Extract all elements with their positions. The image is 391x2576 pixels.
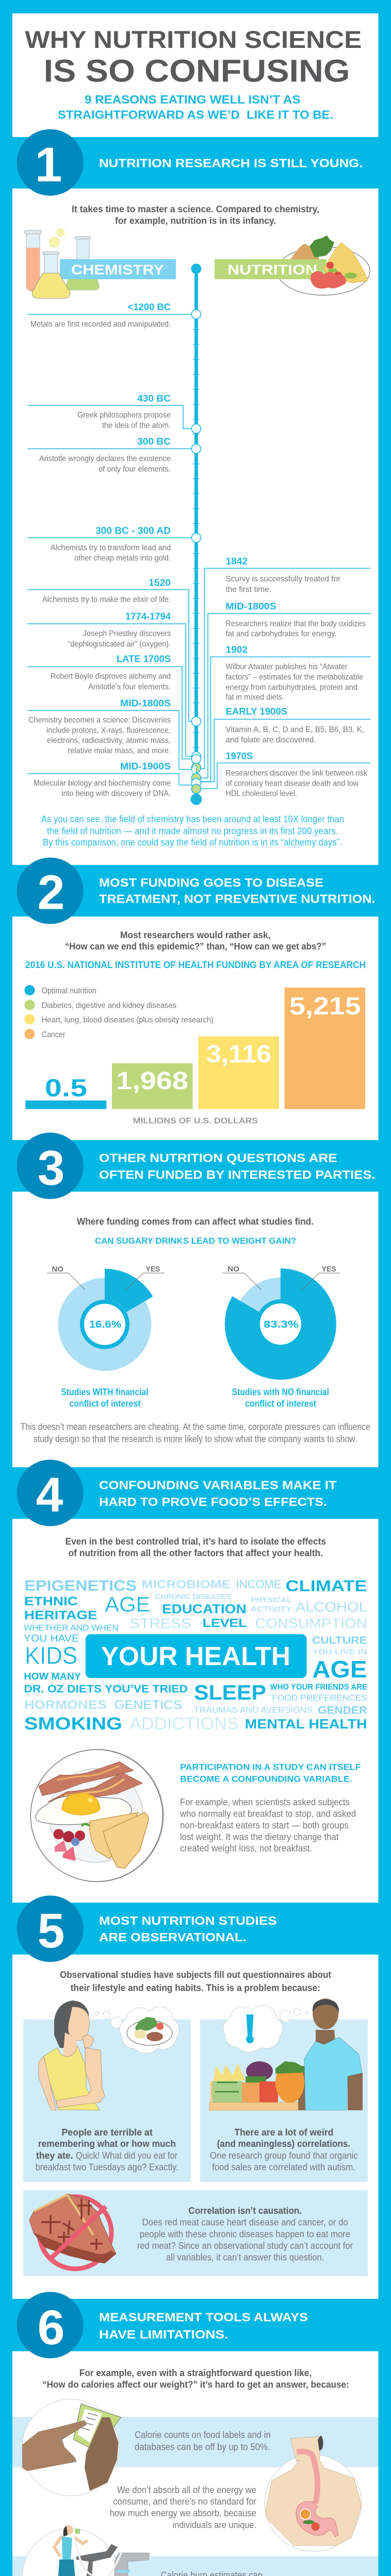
illustration: thinking woman <box>39 2001 105 2110</box>
title: WHY NUTRITION SCIENCE <box>25 26 362 53</box>
word cloud: INCOME <box>236 1578 281 1591</box>
text: One research group found that organic <box>210 2150 358 2161</box>
timeline event: 1842: the first time. <box>226 585 271 594</box>
text: Does red meat cause heart disease and cancer, or do <box>142 2217 348 2227</box>
donut chart: with conflict of interest <box>47 1265 165 1409</box>
word cloud: HOW MANY <box>24 1671 81 1682</box>
timeline event: nutrition mid-1800s: Researchers realize that the body oxidizes <box>226 619 366 629</box>
timeline event: 1200 BC: <1200 BC <box>128 302 171 312</box>
illustration: man with fruit crate <box>209 1998 363 2110</box>
donut chart: with conflict of interest: 16.6% <box>89 1319 122 1330</box>
conclusion text: the field of nutrition — and it made almost no progress in its first 200 years. <box>47 826 338 836</box>
timeline event: chemistry mid-1800s: MID-1800S <box>120 698 171 708</box>
callout: your health: YOUR HEALTH <box>101 1641 290 1671</box>
chart: timeline <box>27 264 371 805</box>
banner: section 3: OFTEN FUNDED BY INTERESTED PARTIES. <box>99 1168 376 1181</box>
legend: Cancer <box>42 1030 66 1039</box>
banner: section 2: MOST FUNDING GOES TO DISEASE <box>99 876 323 889</box>
timeline event: 1200 BC <box>30 302 171 329</box>
word cloud: CHRONIC DISEASES <box>155 1592 232 1601</box>
banner: section 1: 1 <box>35 138 62 192</box>
timeline event: late 1700s: LATE 1700S <box>117 654 171 664</box>
timeline event: 1970s: of coronary heart disease death and low <box>226 779 359 788</box>
word cloud: STRESS <box>129 1616 191 1631</box>
timeline event: 1774-1794: “dephlogisticated air” (oxygen). <box>68 640 171 649</box>
word cloud: FOOD PREFERENCES <box>272 1693 367 1703</box>
bar chart: 1,968 <box>116 1067 188 1095</box>
axis label: MILLIONS OF U.S. DOLLARS <box>133 1116 258 1125</box>
paragraph <box>21 1422 370 1444</box>
timeline event: 1520 <box>42 578 171 604</box>
word cloud: EPIGENETICS <box>24 1578 137 1594</box>
intro text <box>42 2368 349 2389</box>
timeline event: mid-1900s <box>34 761 171 798</box>
text: they ate. <box>36 2150 73 2161</box>
timeline event: early 1900s: EARLY 1900S <box>226 706 287 717</box>
intro text: “How do calories affect our weight?” it’s hard to get an answer, because: <box>42 2379 349 2389</box>
intro text: of nutrition from all the other factors that affect your health. <box>68 1548 323 1558</box>
intro text: Observational studies have subjects fill out questionnaires about <box>60 1970 331 1980</box>
text <box>36 2127 178 2172</box>
word cloud: SLEEP <box>194 1681 266 1704</box>
bar chart: 3,116 <box>206 1041 271 1068</box>
word cloud <box>24 1577 367 1734</box>
title: IS SO CONFUSING <box>44 53 350 88</box>
word cloud: YOU HAVE <box>24 1633 79 1645</box>
band: food labels: databases can be off by up to 50%. <box>135 2442 270 2452</box>
timeline event: 430 BC: Greek philosophers propose <box>77 411 171 420</box>
callout: your health <box>86 1634 307 1678</box>
icon: digestive system <box>265 2435 362 2551</box>
text: energy absorption: consume, and there’s no standard for <box>113 2497 256 2507</box>
icon: hands holding food label <box>22 2399 121 2496</box>
timeline event: 300 BC - 300 AD <box>51 526 171 563</box>
word cloud: HERITAGE <box>24 1608 97 1622</box>
icon: runner on treadmill <box>22 2525 150 2576</box>
timeline event: nutrition mid-1800s: fat and carbohydrates for energy. <box>226 630 336 638</box>
intro text: Most researchers would rather ask, <box>120 930 270 940</box>
thought bubble: exclamation <box>223 2006 308 2052</box>
banner: section 4: 4 <box>36 1468 63 1522</box>
legend: Heart, lung, blood diseases (plus obesity research) <box>42 1016 214 1024</box>
timeline event: 1970s: Researchers discover the link between risk <box>226 769 368 778</box>
banner: section 6: 6 <box>38 2300 64 2355</box>
intro text <box>72 204 319 226</box>
donut chart: no conflict of interest: Studies with NO financial <box>232 1387 329 1397</box>
word cloud: HORMONES <box>24 1698 107 1712</box>
callout heading <box>180 1762 361 1784</box>
text: food sales are correlated with autism. <box>212 2162 355 2172</box>
banner: section 6: HAVE LIMITATIONS. <box>99 2328 228 2341</box>
word cloud: CONSUMPTION <box>255 1616 367 1631</box>
donut chart: no conflict of interest: 83.3% <box>264 1319 299 1330</box>
legend <box>25 985 214 1039</box>
banner: section 6: MEASUREMENT TOOLS ALWAYS <box>99 2311 308 2324</box>
paragraph <box>180 1797 356 1854</box>
bar chart: 5,215 <box>289 993 361 1020</box>
timeline event: 300 BC: of only four elements. <box>99 465 171 474</box>
conclusion text: As you can see, the field of chemistry has been around at least 10X longer than <box>41 814 344 824</box>
timeline event: late 1700s: Robert Boyle disproves alchemy and <box>51 672 171 681</box>
word cloud: ADDICTIONS <box>129 1714 239 1734</box>
timeline event: 1970s: HDL cholesterol level. <box>226 789 297 798</box>
timeline event: mid-1900s: MID-1900S <box>120 761 171 772</box>
thought bubble: meal <box>95 2007 180 2053</box>
word cloud: AGE <box>312 1656 367 1683</box>
text: Correlation isn’t causation. <box>188 2206 302 2216</box>
chart title: 2016 U.S. NATIONAL INSTITUTE OF HEALTH FUNDING BY AREA OF RESEARCH <box>25 959 366 970</box>
banner: section 5: MOST NUTRITION STUDIES <box>99 1914 277 1927</box>
timeline event: 1842: Scurvy is successfully treated for <box>226 575 341 584</box>
banner: section 2: TREATMENT, NOT PREVENTIVE NUTRITION. <box>99 892 376 906</box>
card: memory <box>23 2001 191 2182</box>
text: energy absorption: We don’t absorb all of the energy we <box>117 2485 256 2495</box>
card: correlations <box>200 1998 368 2182</box>
paragraph: lost weight. It was the dietary change that <box>180 1832 338 1842</box>
timeline event: 1774-1794 <box>68 611 171 649</box>
timeline event: 1902: energy from carbohydrates, protein and <box>226 683 357 692</box>
timeline event: 300 BC - 300 AD: other cheap metals into gold. <box>74 554 171 563</box>
banner: section 4 <box>17 1460 337 1526</box>
word cloud: GENDER <box>318 1704 367 1717</box>
legend: Optimal nutrition <box>42 987 96 995</box>
timeline event: 1902: fat in mixed diets. <box>226 693 284 702</box>
callout heading: BECOME A CONFOUNDING VARIABLE. <box>180 1774 352 1784</box>
word cloud: MENTAL HEALTH <box>245 1716 367 1732</box>
panel: section 6 body <box>12 2351 379 2576</box>
timeline event: chemistry mid-1800s: relative molar mass, and more. <box>68 747 171 755</box>
intro text: For example, even with a straightforward question like, <box>79 2368 312 2378</box>
banner: section 3: OTHER NUTRITION QUESTIONS ARE <box>99 1151 337 1164</box>
intro text <box>66 1536 326 1558</box>
text: breakfast two Tuesdays ago? Exactly. <box>36 2162 178 2172</box>
text: remembering what or how much <box>38 2139 176 2149</box>
panel: section 4 body <box>12 1519 379 1903</box>
word cloud: EDUCATION <box>162 1602 247 1617</box>
word cloud: GENETICS <box>114 1698 182 1712</box>
bar chart <box>25 988 365 1109</box>
panel: header <box>12 13 379 137</box>
donut chart: no conflict of interest: NO <box>227 1265 239 1274</box>
timeline event: 430 BC: 430 BC <box>137 394 171 404</box>
conclusion text: By this comparison, one could say the field of nutrition is in its “alchemy days”. <box>43 837 342 848</box>
intro text: their lifestyle and eating habits. This is a problem because: <box>71 1982 320 1993</box>
timeline event: early 1900s: Vitamin A, B, C, D and E, B5, B6, B3, K, <box>226 725 364 734</box>
paragraph: created weight loss, not breakfast. <box>180 1843 312 1854</box>
banner: section 2 <box>17 857 375 924</box>
word cloud: KIDS <box>25 1641 77 1669</box>
donut chart: no conflict of interest <box>223 1265 340 1409</box>
word cloud: AGE <box>105 1592 151 1616</box>
timeline event: 430 BC: the idea of the atom. <box>102 421 171 430</box>
donut chart: no conflict of interest: YES <box>322 1265 336 1274</box>
timeline event: 430 BC <box>77 394 171 430</box>
panel: section 2 body <box>12 917 379 1140</box>
timeline event: 1200 BC: Metals are first recorded and manipulated. <box>30 320 171 329</box>
timeline event: 1902 <box>226 645 363 702</box>
banner: section 1 <box>17 129 363 196</box>
timeline event: 300 BC: 300 BC <box>137 436 171 447</box>
word cloud: YOU LIVE IN <box>312 1648 367 1656</box>
timeline event: 1902: factors” – estimates for the metabolizable <box>226 673 363 682</box>
word cloud: DR. OZ DIETS YOU’VE TRIED <box>24 1683 188 1695</box>
timeline event: nutrition mid-1800s: MID-1800S <box>226 601 276 612</box>
text: energy absorption: how much energy we absorb, because <box>110 2508 256 2518</box>
text: People are terrible at <box>61 2127 153 2138</box>
banner: section 1: NUTRITION RESEARCH IS STILL YOUNG. <box>99 157 363 170</box>
banner: section 5: ARE OBSERVATIONAL. <box>99 1930 247 1944</box>
donut chart: with conflict of interest: YES <box>146 1265 160 1274</box>
word cloud: WHO YOUR FRIENDS ARE <box>270 1683 367 1692</box>
timeline event: 1842 <box>226 556 341 594</box>
timeline event: 1902: 1902 <box>226 645 248 655</box>
timeline event: chemistry mid-1800s: Chemistry becomes a science: Discoveries <box>28 716 171 724</box>
text: There are a lot of weird <box>234 2127 333 2138</box>
text: energy absorption <box>110 2485 256 2530</box>
intro text: for example, nutrition is in its infancy. <box>115 216 276 226</box>
paragraph: non-breakfast eaters to start — both groups <box>180 1820 349 1831</box>
timeline event: late 1700s: Aristotle’s four elements. <box>88 683 171 691</box>
intro text <box>65 930 326 952</box>
timeline event: 1774-1794: Joseph Priestley discovers <box>83 630 171 638</box>
timeline event: 1902: Wilbur Atwater publishes his “Atwater <box>226 663 348 671</box>
text: people with these chronic diseases happen to eat more <box>140 2229 350 2240</box>
word cloud: LEVEL <box>202 1616 247 1630</box>
timeline event: 300 BC <box>39 436 171 474</box>
conclusion text <box>41 814 344 848</box>
title <box>25 26 362 88</box>
paragraph: who normally eat breakfast to stop, and asked <box>180 1808 356 1819</box>
banner: section 4: HARD TO PROVE FOOD’S EFFECTS. <box>99 1495 327 1509</box>
timeline event: 1970s <box>226 751 368 798</box>
banner: section 3 <box>17 1132 375 1199</box>
timeline event: 1520: 1520 <box>149 578 171 588</box>
timeline event: 1520: Alchemists try to make the elixir of life. <box>42 596 171 604</box>
subtitle: 9 REASONS EATING WELL ISN’T AS <box>85 93 300 106</box>
intro text: “How can we end this epidemic?” than, “How can we get abs?” <box>65 941 326 952</box>
donut chart: no conflict of interest: conflict of interest <box>245 1399 316 1409</box>
panel: section 1 body <box>12 189 379 865</box>
text <box>137 2206 353 2263</box>
icon: breakfast plate <box>30 1749 164 1882</box>
word cloud: ETHNIC <box>24 1595 78 1608</box>
word cloud: PHYSICAL <box>251 1596 292 1604</box>
word cloud: CULTURE <box>312 1635 367 1647</box>
subtitle: STRAIGHTFORWARD AS WE’D LIKE IT TO BE. <box>58 108 333 122</box>
card: correlation vs causation <box>23 2190 368 2276</box>
paragraph: For example, when scientists asked subjects <box>180 1797 350 1807</box>
icon: crossed-out steak <box>29 2194 116 2269</box>
timeline event: chemistry mid-1800s <box>28 698 171 755</box>
band: calorie burn <box>12 2556 379 2576</box>
timeline event: 300 BC - 300 AD: 300 BC - 300 AD <box>95 526 171 536</box>
timeline event: 1774-1794: 1774-1794 <box>125 611 171 621</box>
word cloud: ALCOHOL <box>296 1599 367 1615</box>
donut chart: with conflict of interest: Studies WITH financial <box>61 1387 149 1397</box>
banner: section 5: 5 <box>38 1904 64 1958</box>
timeline event: 300 BC: Aristotle wrongly declares the existence <box>39 454 171 463</box>
band: food labels <box>12 2417 379 2467</box>
banner: section 2: 2 <box>38 866 64 920</box>
icon: plate of food and label <box>215 235 370 295</box>
banner: section 4: CONFOUNDING VARIABLES MAKE IT <box>99 1479 337 1492</box>
word cloud: CLIMATE <box>286 1577 367 1595</box>
banner: section 3: 3 <box>38 1141 64 1196</box>
word cloud: SMOKING <box>24 1714 122 1734</box>
panel: section 5 body <box>12 1955 379 2299</box>
intro text: It takes time to master a science. Compared to chemistry, <box>72 204 319 214</box>
timeline event: early 1900s: and folate are discovered. <box>226 736 316 744</box>
word cloud: MICROBIOME <box>142 1578 231 1591</box>
band: food labels: Calorie counts on food labels and in <box>135 2430 270 2440</box>
icon: chemistry flasks and label: CHEMISTRY <box>71 262 164 278</box>
donut chart: with conflict of interest: NO <box>52 1265 63 1274</box>
text: (and meaningless) correlations. <box>217 2139 350 2149</box>
word cloud: WHETHER AND WHEN <box>24 1623 119 1633</box>
intro text: Even in the best controlled trial, it’s hard to isolate the effects <box>66 1536 326 1547</box>
timeline event: nutrition mid-1800s <box>226 601 366 638</box>
timeline event: 1970s: 1970S <box>226 751 253 761</box>
subtitle <box>58 93 333 122</box>
timeline event: chemistry mid-1800s: include protons, X-rays, fluorescence, <box>46 726 171 735</box>
text <box>210 2127 358 2172</box>
word cloud: TRAUMAS AND AVERSIONS <box>194 1705 313 1715</box>
text: energy absorption: individuals are unique. <box>172 2520 256 2530</box>
timeline event: mid-1900s: Molecular biology and biochemistry come <box>34 779 171 788</box>
legend: Diabetes, digestive and kidney diseases <box>42 1002 176 1010</box>
intro text: Where funding comes from can affect what studies find. <box>77 1216 314 1227</box>
timeline event: mid-1900s: into being with discovery of DNA. <box>61 789 171 798</box>
chart question: CAN SUGARY DRINKS LEAD TO WEIGHT GAIN? <box>95 1236 296 1246</box>
word cloud: ACTIVITY <box>251 1605 292 1614</box>
donut chart: with conflict of interest: conflict of interest <box>69 1399 141 1409</box>
bar chart: 0.5 <box>45 1075 87 1102</box>
timeline event: late 1700s <box>51 654 171 691</box>
icon: plate of food and label: NUTRITION <box>227 262 317 278</box>
text: red meat? Since an observational study can’t account for <box>137 2241 353 2251</box>
timeline event: early 1900s <box>226 706 364 744</box>
timeline event: 1842: 1842 <box>226 556 248 567</box>
text: Quick! What did you eat for <box>76 2150 177 2161</box>
icon: chemistry flasks and label <box>25 229 176 298</box>
timeline event: chemistry mid-1800s: electrons, radioactivity, atomic mass, <box>47 736 171 745</box>
banner: section 5 <box>17 1895 277 1962</box>
banner: section 6 <box>17 2292 308 2359</box>
timeline event: 300 BC - 300 AD: Alchemists try to transform lead and <box>51 544 171 552</box>
text: all variables, it can’t answer this question. <box>166 2252 324 2263</box>
panel: section 3 body <box>12 1192 379 1467</box>
intro text <box>60 1970 331 1993</box>
callout heading: PARTICIPATION IN A STUDY CAN ITSELF <box>180 1762 361 1772</box>
